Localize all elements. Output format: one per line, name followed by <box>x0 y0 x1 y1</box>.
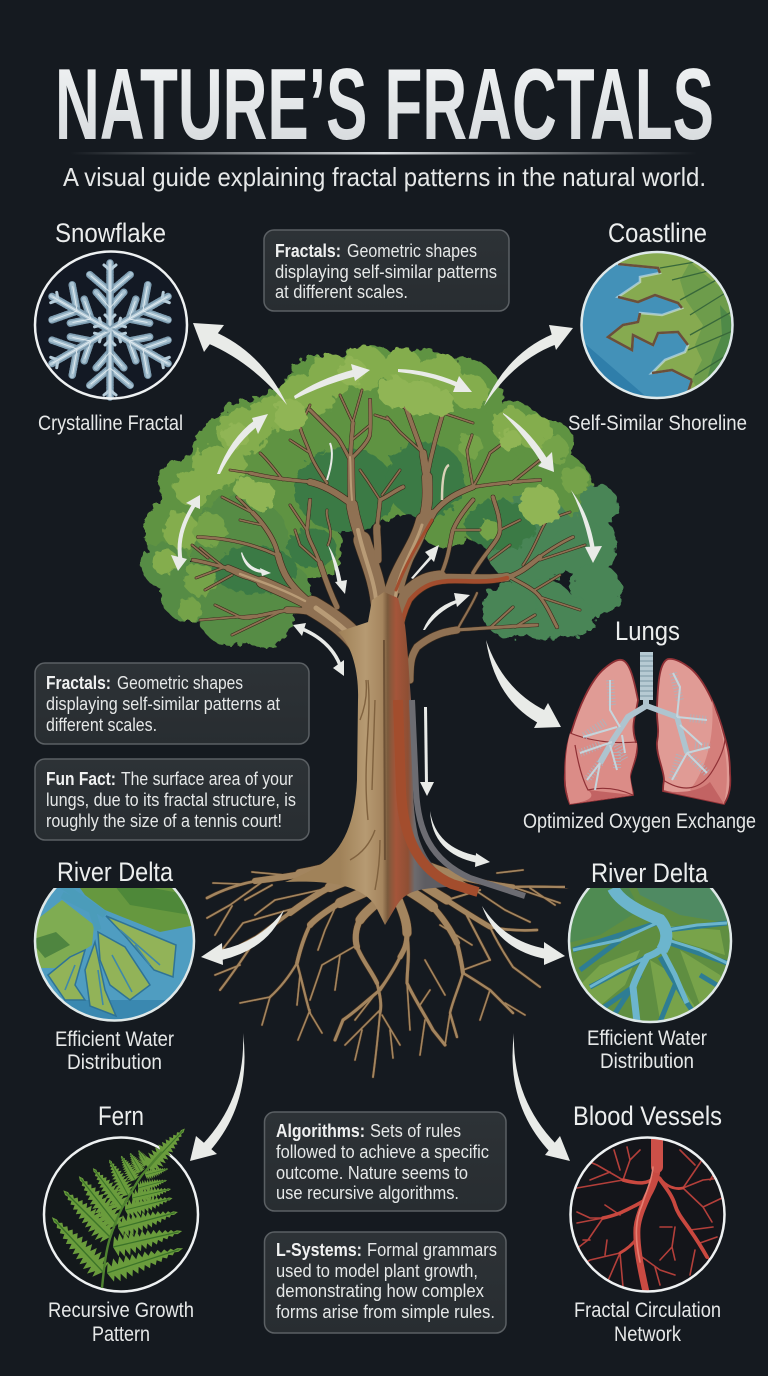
heading: lungs: Lungs <box>615 616 680 646</box>
callout: algorithms: followed to achieve a specific <box>276 1142 489 1162</box>
arrow: to right river delta <box>482 906 565 965</box>
caption: fern <box>48 1298 194 1346</box>
callout: algorithms: Sets of rules <box>370 1121 461 1141</box>
heading: fern: Fern <box>98 1101 144 1131</box>
callout: fun fact: roughly the size of a tennis court! <box>46 811 282 831</box>
caption: river delta left: Efficient Water <box>55 1027 174 1051</box>
callout: l-systems: forms arise from simple rules. <box>276 1302 495 1322</box>
caption: river delta left: Distribution <box>67 1050 162 1074</box>
arrow: to left river delta <box>201 910 284 965</box>
panel: coastline <box>568 218 747 435</box>
heading: blood vessels: Blood Vessels <box>573 1101 722 1131</box>
callout: fractals top <box>264 230 509 311</box>
icon: river delta right circle <box>568 888 732 1024</box>
callout: l-systems: Formal grammars <box>367 1240 497 1260</box>
callout: fun fact <box>35 759 309 840</box>
callout: fractals left <box>35 663 309 744</box>
panel: snowflake <box>35 218 187 435</box>
tree light foliage clumps <box>222 358 560 525</box>
arrow: to snowflake <box>193 323 287 405</box>
heading: coastline: Coastline <box>608 218 707 248</box>
arrow: to coastline <box>484 325 573 406</box>
icon: lungs <box>565 652 730 804</box>
callout: fractals top: at different scales. <box>275 282 408 302</box>
heading: snowflake: Snowflake <box>55 218 166 248</box>
callout: algorithms <box>264 1112 506 1211</box>
callout: fractals left: Geometric shapes <box>117 673 243 693</box>
arrow: to fern <box>190 1033 245 1161</box>
callout: fractals top: displaying self-similar patterns <box>275 262 497 282</box>
callout: fractals left: different scales. <box>46 715 157 735</box>
tree trunk <box>285 592 525 925</box>
caption: blood vessels <box>574 1298 721 1346</box>
label backing: river delta left <box>30 850 200 888</box>
callout: fractals left: displaying self-similar patterns at <box>46 694 280 714</box>
arrow: to blood vessels <box>513 1033 570 1161</box>
callout: algorithms: Algorithms: <box>276 1121 365 1141</box>
tree roots <box>207 847 567 1077</box>
icon: snowflake circle <box>35 252 187 398</box>
callout: fractals top: Fractals: <box>275 241 341 261</box>
label backing: river delta right <box>565 850 735 888</box>
callout: fun fact: lungs, due to its fractal structure, is <box>46 790 296 810</box>
subtitle: A visual guide explaining fractal patterns in the natural world. <box>63 162 706 192</box>
callout: l-systems <box>264 1232 506 1333</box>
heading: river delta left: River Delta <box>57 857 174 887</box>
panel: river delta left <box>34 862 196 1069</box>
arrows: tree canopy and roots <box>171 364 602 867</box>
icon: fern circle <box>43 1121 198 1292</box>
caption: blood vessels: Fractal Circulation <box>574 1298 721 1322</box>
panel: lungs <box>523 616 756 833</box>
callout: algorithms: outcome. Nature seems to <box>276 1163 468 1183</box>
callout: algorithms: use recursive algorithms. <box>276 1183 459 1203</box>
caption: river delta left <box>55 1027 174 1074</box>
heading: river delta right: River Delta <box>591 858 709 888</box>
caption: river delta right <box>587 1026 707 1073</box>
callout: l-systems: used to model plant growth, <box>276 1261 478 1281</box>
caption: fern: Recursive Growth <box>48 1298 194 1322</box>
tree canopy <box>142 346 622 648</box>
caption: blood vessels: Network <box>614 1322 681 1346</box>
caption: river delta right: Distribution <box>600 1049 694 1073</box>
callout: fractals top: Geometric shapes <box>347 241 477 261</box>
panel: blood vessels <box>570 1101 724 1346</box>
arrow: to lungs <box>486 640 561 728</box>
icon: river delta left circle <box>34 888 196 1022</box>
icon: blood vessels circle <box>570 1138 724 1292</box>
callout: fun fact: Fun Fact: <box>46 769 116 789</box>
tree branches <box>192 390 585 690</box>
caption: river delta right: Efficient Water <box>587 1026 707 1050</box>
panel: fern <box>43 1101 198 1346</box>
callout: fun fact: The surface area of your <box>121 769 293 789</box>
tree <box>142 346 622 1077</box>
callout: l-systems: L-Systems: <box>276 1240 362 1260</box>
icon: coastline circle <box>580 250 734 400</box>
callout: l-systems: demonstrating how complex <box>276 1281 484 1301</box>
callout: fractals left: Fractals: <box>46 673 111 693</box>
caption: fern: Pattern <box>92 1322 150 1346</box>
caption: snowflake: Crystalline Fractal <box>38 411 183 435</box>
panel: river delta right <box>565 862 732 1068</box>
